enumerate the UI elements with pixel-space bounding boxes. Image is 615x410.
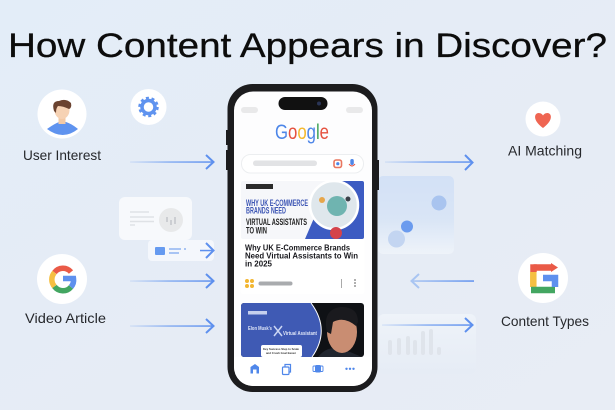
phone [226,84,379,392]
bottom navigation [234,357,372,386]
arrow: to AI matching [385,155,472,170]
icon: google g left [37,254,87,304]
card one [240,180,364,294]
label: video article: Video Article [25,310,106,326]
dynamic island [278,97,328,110]
label: content types: Content Types [501,313,589,329]
article headline: Need Virtual Assistants to Win [245,252,358,260]
arrow: video article lower [130,319,214,333]
icon: google g right [518,253,568,303]
icon: heart [526,102,560,136]
label: AI matching: AI Matching [508,142,582,158]
panel: right gradient card [378,176,454,254]
card: small tag [148,240,214,261]
article image one: WHY UK E-COMMERCE [246,198,308,208]
arrow: video article upper [130,274,214,288]
google logo: Google [275,121,329,144]
article image two: Key Success Step to Scale [263,347,299,351]
article headline: in 2025 [245,260,273,268]
search bar [242,154,364,173]
arrow: from content types [411,274,474,288]
arrow: to content types [382,318,472,332]
article image one: BRANDS NEED [246,206,286,216]
article meta row [245,279,356,288]
arrow: card [200,243,214,258]
article image two: and Crush Goal Easier [266,351,297,355]
icon: gear [130,89,166,125]
article image one [241,181,364,239]
article headline: Why UK E-Commerce Brands [245,244,351,252]
panel: right bar chart [378,314,476,374]
icon: user avatar [38,90,86,138]
phone body [228,84,378,392]
phone screen [234,92,372,386]
article image two [241,303,364,357]
article image two: Virtual Assistant [283,331,317,337]
article image one: VIRTUAL ASSISTANTS [246,217,307,227]
article image two: Elon Musk's [248,326,272,332]
card: floating chart [119,197,192,240]
title: How Content Appears in Discover? [8,27,607,65]
label: user interest: User Interest [23,147,101,163]
arrow: user interest [130,155,214,169]
article image one: TO WIN [246,226,267,236]
